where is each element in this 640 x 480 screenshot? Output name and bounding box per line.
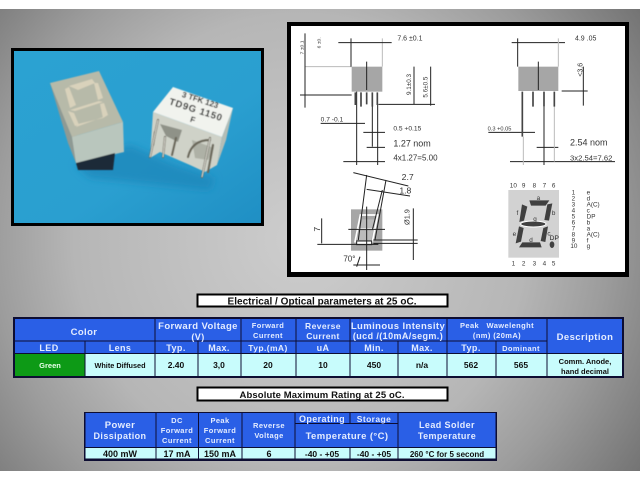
drawing: front view outline: 2.7 xyxy=(402,172,414,182)
table header: Forward Voltage xyxy=(158,321,238,332)
icon: seven-segment display, rear with pins xyxy=(150,87,233,177)
heading: electrical parameters xyxy=(198,294,448,308)
part marking: 3 TFK 123 xyxy=(181,90,220,110)
table header: Forward xyxy=(252,321,284,330)
table header: Temperature (°C) xyxy=(306,431,388,442)
table header: Operating xyxy=(299,414,345,424)
pin table: 1 xyxy=(572,190,576,197)
pin table xyxy=(570,190,600,250)
drawing: side view, right: 3x2.54=7.62 xyxy=(570,154,612,163)
table data row: hand decimal xyxy=(561,367,609,376)
table header: Power xyxy=(105,420,135,431)
table header: Peak Wawelenght xyxy=(460,321,534,330)
table header: (nm) (20mA) xyxy=(473,331,521,340)
pin table: 5 xyxy=(572,214,576,221)
table data row: 565 xyxy=(514,360,528,370)
table data row: 150 mA xyxy=(204,449,237,459)
table data row: 17 mA xyxy=(163,449,191,459)
drawing: pinout diagram: f xyxy=(516,210,518,217)
table header: Dissipation xyxy=(94,431,146,441)
table header: Dominant xyxy=(502,344,540,353)
table header: Reverse xyxy=(305,321,341,331)
table header: Typ. xyxy=(166,343,186,353)
drawing: pinout diagram: 5 xyxy=(552,260,556,267)
pin table: A(C) xyxy=(587,232,600,239)
pin table: 9 xyxy=(572,238,576,245)
table data row: -40 - +05 xyxy=(305,449,339,459)
table header xyxy=(39,321,613,353)
table data row: 6 xyxy=(266,449,272,459)
pin table: e xyxy=(587,190,591,197)
table header: DC xyxy=(171,416,183,425)
pin table: DP xyxy=(587,214,595,221)
pin table: 4 xyxy=(572,208,576,215)
drawing: side view, right: 0.3 +0.05 xyxy=(488,127,511,133)
table data row: 562 xyxy=(464,360,478,370)
pin table: 8 xyxy=(572,232,576,239)
drawing: pinout diagram: e xyxy=(513,231,517,238)
table header: uA xyxy=(317,343,329,353)
drawing: front view outline: Ø1.9 xyxy=(402,209,411,225)
table data row: Comm. Anode, xyxy=(559,357,611,366)
table header: Current xyxy=(306,331,340,341)
table header: Lens xyxy=(109,343,131,353)
table header: Current xyxy=(162,436,192,445)
table data row: Green xyxy=(39,361,61,370)
drawing: side view, front: 6 ±0. xyxy=(316,37,322,48)
pin table: d xyxy=(587,196,591,203)
table data row xyxy=(39,357,611,376)
table data row: 260 °C for 5 second xyxy=(410,450,484,459)
drawing: pinout diagram: g xyxy=(533,216,537,223)
table header: Min. xyxy=(364,343,384,353)
drawing: front view outline: 7 xyxy=(312,227,322,232)
drawing: pinout diagram: 3 xyxy=(533,260,537,267)
drawing: front view outline: 1.8 xyxy=(399,185,412,195)
drawing: front view outline xyxy=(312,172,418,270)
table header: Luminous Intensity xyxy=(351,321,445,332)
drawing: pinout diagram: 6 xyxy=(552,182,556,189)
drawing: side view, right: <3.6 xyxy=(578,63,585,77)
drawing: pinout diagram: b xyxy=(552,210,556,217)
table data row: 450 xyxy=(367,360,381,370)
pin table: 7 xyxy=(572,226,576,233)
table data row: 2.40 xyxy=(168,360,185,370)
part marking xyxy=(165,87,227,133)
drawing: side view, front xyxy=(299,33,438,165)
table header: (ucd /(10mA/segm.) xyxy=(353,331,443,341)
drawing: side view, front: 9.1±0.3 xyxy=(406,73,413,95)
drawing: pinout diagram: 1 xyxy=(512,260,516,267)
panel: technical drawing xyxy=(287,22,629,277)
drawing: side view, front: 4x1.27=5.00 xyxy=(393,154,438,163)
table header: Color xyxy=(71,327,97,338)
table data row: -40 - +05 xyxy=(357,449,391,459)
table header: Forward xyxy=(161,426,193,435)
pin table: 3 xyxy=(572,202,576,209)
table data row: n/a xyxy=(416,360,428,370)
photo shadows xyxy=(75,145,215,190)
pin table: f xyxy=(587,238,589,245)
table header: Max. xyxy=(208,343,230,353)
icon: seven-segment display, front xyxy=(50,71,124,170)
pin table: b xyxy=(587,220,591,227)
table header: LED xyxy=(39,343,59,353)
drawing: pinout diagram: 9 xyxy=(522,182,526,189)
table data row: 10 xyxy=(318,360,328,370)
part marking: F xyxy=(189,115,197,125)
table: absolute maximum rating xyxy=(84,412,497,461)
drawing: side view, front: 7.6 ±0.1 xyxy=(397,35,423,42)
table data row: White Diffused xyxy=(94,361,146,370)
heading: absolute maximum rating xyxy=(198,388,448,401)
table header: Peak xyxy=(210,416,230,425)
drawing: pinout diagram: DP xyxy=(550,235,559,242)
pin table: g xyxy=(587,243,591,250)
drawing: pinout diagram: 8 xyxy=(533,182,537,189)
drawing: front view outline: 70° xyxy=(343,255,355,264)
pin table: 2 xyxy=(572,196,576,203)
table data row xyxy=(103,449,484,459)
table: electrical and optical parameters xyxy=(13,317,624,378)
table header: Current xyxy=(205,436,235,445)
pin table: 6 xyxy=(572,220,576,227)
drawing: side view, front: 1.27 nom xyxy=(393,138,431,148)
drawing: pinout diagram: a xyxy=(537,195,541,202)
drawing: side view, front: 5.6±0.5 xyxy=(423,76,430,98)
table data row: 20 xyxy=(263,360,273,370)
pin table: c xyxy=(587,208,590,215)
drawing: pinout diagram: 2 xyxy=(522,260,526,267)
drawing: side view, right xyxy=(488,35,615,165)
panel: product photo xyxy=(11,48,264,226)
heading: electrical parameters: Electrical / Optical parameters at 25 oC. xyxy=(228,296,417,308)
table header: Temperature xyxy=(418,431,476,441)
drawing: pinout diagram: 7 xyxy=(543,182,547,189)
table header: Voltage xyxy=(254,431,284,440)
drawing: pinout diagram xyxy=(508,182,600,267)
drawing: side view, front: 7 ±0.1 xyxy=(299,40,305,54)
table header: Forward xyxy=(204,426,236,435)
drawing: pinout diagram: 4 xyxy=(543,260,547,267)
drawing: pinout diagram: d xyxy=(529,237,533,244)
pin table: A(C) xyxy=(587,202,600,209)
heading: absolute maximum rating: Absolute Maximum Rating at 25 oC. xyxy=(240,390,404,401)
table header: Current xyxy=(253,331,283,340)
table data row: 400 mW xyxy=(103,449,138,459)
drawing: side view, right: 2.54 nom xyxy=(570,138,607,148)
table header: Typ.(mA) xyxy=(248,343,288,353)
drawing: side view, front: 0.7 -0.1 xyxy=(321,117,344,124)
table header: (V) xyxy=(191,332,205,342)
pin table: a xyxy=(587,226,591,233)
drawing: pinout diagram: c xyxy=(547,230,551,237)
drawing: side view, right: 4.9 .05 xyxy=(575,35,596,42)
table header: Description xyxy=(557,332,613,343)
table header: Reverse xyxy=(253,421,285,430)
part marking: TD9G 1150 xyxy=(168,96,224,124)
table header: Max. xyxy=(411,343,433,353)
table header: Lead Solder xyxy=(419,420,475,430)
table header: Storage xyxy=(357,414,391,424)
table header: Typ. xyxy=(461,343,481,353)
drawing: side view, front: 0.5 +0.15 xyxy=(393,126,422,133)
table header xyxy=(94,414,476,445)
table data row: 3,0 xyxy=(213,360,225,370)
pin table: 10 xyxy=(570,243,578,250)
drawing: pinout diagram: 10 xyxy=(510,182,517,189)
